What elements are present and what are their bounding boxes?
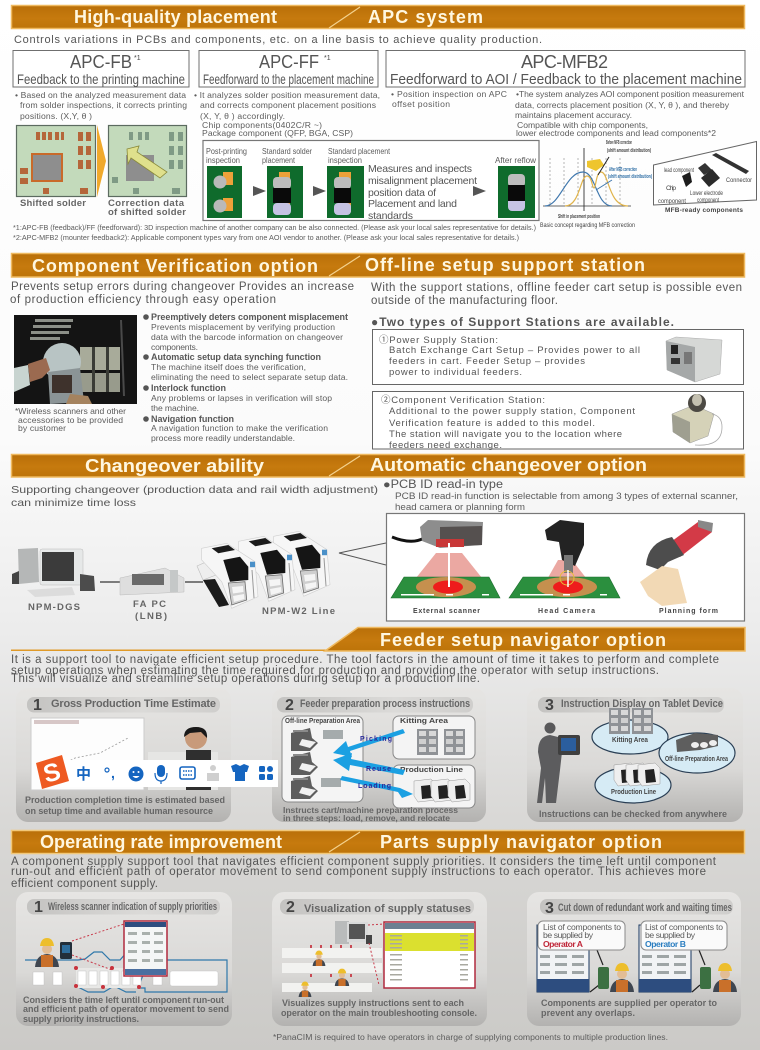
- arrow: orange chevron: [97, 125, 106, 197]
- panel: inspection flow: Standard solder: [262, 146, 312, 156]
- banner: Component Verification / Off-line setup: Off-line setup support station: [365, 255, 645, 275]
- labels: line equipment: NPM-W2 Line: [262, 606, 335, 617]
- box: APC-FB: [13, 50, 189, 87]
- list: verification features: The machine itself does the verification,: [151, 362, 306, 372]
- text: card 2 description: [281, 998, 477, 1018]
- list: verification features: [143, 312, 348, 443]
- chart: MFB correction concept: Basic concept regarding MFB correction: [540, 222, 635, 229]
- text: inspection description: position data of: [368, 187, 436, 199]
- intro: parts supply: [11, 856, 717, 890]
- box: APC-FB: APC-FB: [70, 52, 132, 72]
- box: APC-FF: *1: [324, 55, 331, 62]
- banner: Changeover ability / Automatic changeover: Automatic changeover option: [370, 455, 647, 475]
- text: APC-MFB2 description: lower electrode components and lead components*2: [516, 128, 716, 138]
- text: APC-FF description: • It analyzes solder position measurement data,: [194, 90, 380, 100]
- labels: line equipment: [28, 599, 335, 622]
- card 1: gross production time estimate: [16, 688, 231, 822]
- toolbar glyphs: [76, 764, 273, 784]
- section: changeover ability / automatic changeover: [11, 454, 744, 622]
- icon: after reflow board: [498, 166, 535, 218]
- text: card 3 description: Components are supplied per operator to: [541, 998, 718, 1008]
- box: power supply station: ①Power Supply Station:: [379, 335, 498, 346]
- chart: MFB correction concept: (shift amount distribution): [607, 148, 651, 154]
- text: card 1 description: Production completion time is estimated based: [25, 795, 225, 805]
- text: APC-MFB2 description: [391, 89, 745, 138]
- intro: component verification: [10, 281, 354, 306]
- oval: kitting area: Kitting Area: [612, 737, 648, 744]
- text: APC-MFB2 description: data, corrects placement position (X, Y, θ ), and thereby: [515, 100, 730, 110]
- list: verification features: Navigation function: [151, 414, 234, 424]
- text: APC-FF description: Chip components(0402C/R ~): [202, 120, 322, 130]
- card 2: feeder preparation process: [272, 688, 486, 823]
- icon: FA PC: [120, 568, 184, 595]
- oval: production line: Production Line: [611, 789, 656, 796]
- text: card 1 description: [25, 795, 225, 816]
- footnotes: [13, 223, 536, 242]
- intro: changeover: Supporting changeover (production data and rail width adjustment): [11, 484, 378, 496]
- box: component verification station: feeders need exchange.: [389, 440, 502, 451]
- text: APC-MFB2 description: •The system analyzes AOI component position measurement: [516, 89, 745, 99]
- panel: kitting area: Kitting Area: [400, 718, 448, 725]
- group: operator B instruction: Operator B: [645, 939, 686, 949]
- photo: wireless scanner in use: [14, 315, 137, 404]
- text: APC-FF description: (X, Y, θ ) accordingly.: [200, 111, 285, 121]
- text: inspection description: [368, 163, 477, 222]
- card 3: tablet instruction display: 3: [545, 697, 554, 714]
- text: card 2 description: Instructs cart/machine preparation process: [283, 805, 458, 815]
- labels: line equipment: NPM-DGS: [28, 602, 80, 613]
- intro: changeover: can minimize time loss: [11, 497, 136, 509]
- intro: feeder setup: setup operations when estimating the time required for production and providing the operator with setup instructions.: [11, 665, 659, 677]
- box: component verification station: Verification feature is added to this model.: [389, 418, 595, 429]
- panel: inspection flow: Post-printing: [206, 146, 247, 156]
- card 1: wireless scanner indication: [16, 892, 232, 1026]
- section: high-quality placement / APC system: [12, 6, 756, 242]
- banner: Operating rate / Parts supply navigator: Operating rate improvement: [40, 832, 282, 852]
- card 3: tablet instruction display: [527, 688, 743, 822]
- caption: wireless scanner: accessories to be provided: [18, 415, 123, 425]
- group: operator A instruction: Operator A: [543, 939, 583, 949]
- group: operator B instruction: List of components to: [645, 922, 723, 932]
- group: operator A instruction: [537, 921, 634, 992]
- arrows: picking, reuse, loading: [333, 729, 413, 798]
- labels: solder images: Shifted solder: [20, 198, 86, 209]
- labels: arrows: Loading: [358, 783, 391, 790]
- image: shifted solder board: [16, 126, 96, 196]
- intro: component verification: of production efficiency through easy operation: [10, 294, 276, 306]
- text: APC-MFB2 description: Compatible with chip components,: [517, 120, 648, 130]
- chart: MFB correction concept: Shift in placement position: [558, 214, 600, 220]
- text: APC-FB description: • Based on the analyzed measurement data: [15, 90, 186, 100]
- box: APC-MFB2: [386, 50, 745, 88]
- intro: off-line support: outside of the manufacturing floor.: [371, 295, 558, 307]
- card 2: visualization of supply statuses: Visualization of supply statuses: [304, 903, 471, 915]
- diagram: operator path: [25, 924, 227, 992]
- list: verification features: Automatic setup data synching function: [151, 352, 321, 362]
- text: card 1 description: and efficient path of operator movement to send: [23, 1004, 229, 1014]
- section: component verification / off-line setup: [10, 254, 744, 451]
- arrow: flow 1: [253, 186, 266, 196]
- panel: inspection flow: inspection: [206, 155, 240, 165]
- intro: off-line support: [371, 282, 742, 307]
- intro: feeder setup: It is a support tool to navigate efficient setup procedure. The tool factors in the amount of time it takes to perform and complete: [11, 654, 719, 666]
- icon: verification station unit: [672, 394, 722, 445]
- banner: Component Verification / Off-line setup: [12, 254, 744, 277]
- text: APC-MFB2 description: • Position inspection on APC: [391, 89, 507, 99]
- text: card 1 description: on setup time and available human resource: [25, 806, 213, 816]
- text: inspection description: misalignment placement: [368, 175, 477, 187]
- group: operator B instruction: be supplied by: [645, 930, 696, 940]
- banner: High-quality placement / APC system: APC system: [368, 7, 483, 27]
- text: card 1 description: supply priority instructions.: [23, 1014, 139, 1024]
- panel: MFB-ready components: Lower electrode: [690, 190, 723, 197]
- caption: wireless scanner: [15, 406, 126, 433]
- intro: changeover: [11, 484, 378, 509]
- text: APC-FB description: from solder inspections, it corrects printing: [20, 100, 187, 110]
- list: verification features: the machine.: [151, 403, 199, 413]
- intro: feeder setup: This will visualize and streamline setup operations during setup for a production line.: [11, 673, 480, 685]
- list: verification features: Any problems or lapses in verification will stop: [151, 393, 332, 403]
- card 2: visualization of supply statuses: 2: [286, 899, 295, 916]
- illustration: external scanner: [391, 520, 500, 598]
- box: APC-MFB2: APC-MFB2: [521, 52, 608, 72]
- panel: MFB-ready components: Connector: [726, 177, 753, 184]
- chart: MFB correction concept: [540, 140, 652, 229]
- panel: inspection flow: After reflow: [495, 155, 537, 165]
- list: verification features: eliminating the need to select separate setup data.: [151, 372, 348, 382]
- icon: standard placement board: [327, 166, 364, 218]
- box: power supply station: power to individual feeders.: [389, 367, 522, 378]
- card 1: gross production time estimate: 1: [33, 697, 42, 714]
- banner: High-quality placement / APC system: [12, 6, 744, 28]
- box: component verification station: The station will navigate you to the location where: [389, 429, 622, 440]
- card 2: visualization of supply statuses: [272, 892, 487, 1026]
- box: power supply station: [372, 330, 744, 384]
- screen: supply priority list: [124, 921, 167, 976]
- icon: NPM-DGS computer: [12, 548, 95, 597]
- panel: MFB-ready components: lead component: [664, 168, 694, 174]
- panel: MFB-ready components: Chip: [666, 185, 676, 192]
- text: card 2 description: [283, 805, 458, 823]
- icon: console computer: [335, 921, 372, 944]
- connector: PC to FA PC: [100, 581, 120, 583]
- callout lines to panel: [339, 543, 386, 565]
- labels: arrows: [358, 736, 392, 790]
- intro: parts supply: efficient component supply.: [11, 878, 158, 890]
- heading: two types of support stations: ●Two types of Support Stations are available.: [371, 315, 674, 329]
- panel: inspection flow: inspection: [328, 155, 362, 165]
- text: PCB ID read-in type: ●PCB ID read-in type: [383, 479, 503, 491]
- illustration: head camera: [509, 520, 620, 598]
- text: card 2 description: in three steps: load, remove, and relocate: [283, 813, 450, 823]
- box: APC-FF: Feedforward to the placement machine: [203, 71, 374, 87]
- arrow: flow 3: [473, 186, 486, 196]
- text: inspection description: standards: [368, 210, 413, 222]
- text: card 2 description: Visualizes supply instructions sent to each: [282, 998, 464, 1008]
- connector: FA PC to line: [185, 581, 203, 583]
- card 3: cut down of redundant work: [527, 892, 741, 1026]
- box: power supply station: feeders in cart. Feeder Setup – provides: [389, 356, 585, 367]
- labels: line equipment: FA PC: [133, 599, 166, 610]
- arrow: flow 2: [313, 186, 326, 196]
- panel: kitting area: [393, 716, 475, 759]
- banner: Feeder setup navigator option: [11, 628, 745, 651]
- panel: inspection flow: placement: [262, 155, 296, 165]
- illustration: planning form scanner: [640, 520, 713, 606]
- icon: worker with scanner: [35, 938, 72, 967]
- box: APC-FB: Feedback to the printing machine: [17, 71, 185, 87]
- intro text: Controls variations in PCBs and components, etc. on a line basis to achieve quality production.: [14, 34, 542, 46]
- icon: operator with tablet: [537, 722, 580, 803]
- icon: orange S logo: S: [40, 757, 64, 789]
- banner: High-quality placement / APC system: High-quality placement: [74, 7, 277, 27]
- icon: post-printing board: [207, 166, 242, 218]
- text: card 2 description: operator on the main troubleshooting console.: [281, 1008, 477, 1018]
- text: APC-FB description: positions. (X,Y, θ ): [20, 111, 92, 121]
- text: APC-FF description: and corrects component placement positions: [200, 100, 376, 110]
- card 3: tablet instruction display: Instruction Display on Tablet Device: [561, 698, 723, 710]
- text: APC-FF description: [194, 90, 380, 138]
- icon: orange S logo: [36, 755, 69, 789]
- text: APC-FB description: [15, 90, 187, 121]
- caption: wireless scanner: *Wireless scanners and other: [15, 406, 126, 416]
- chart: MFB correction concept: Before MFB correction: [606, 140, 632, 146]
- list: verification features: Interlock function: [151, 383, 226, 393]
- text: card 3 description: Instructions can be checked from anywhere: [539, 809, 727, 819]
- intro: off-line support: With the support stations, offline feeder cart setup is possible even: [371, 282, 742, 294]
- banner: Component Verification / Off-line setup: Component Verification option: [32, 256, 318, 276]
- toolbar glyphs: 中: [76, 766, 91, 783]
- box: component verification station: ②Component Verification Station:: [381, 395, 545, 406]
- labels: line equipment: (LNB): [135, 611, 167, 622]
- labels: solder images: of shifted solder: [108, 207, 186, 218]
- label: planning form: Planning form: [659, 608, 718, 615]
- label: MFB-ready components: MFB-ready components: [665, 207, 743, 214]
- image: correction data board: [108, 126, 186, 196]
- text: APC-MFB2 description: offset position: [392, 99, 450, 109]
- chart: MFB correction concept: After MFB correction: [609, 167, 637, 173]
- list: verification features: Preemptively deters component misplacement: [151, 312, 348, 322]
- text: card 3 description: prevent any overlaps.: [541, 1008, 635, 1018]
- box: component verification station: [372, 392, 744, 451]
- banner: Changeover ability / Automatic changeover: [12, 454, 744, 477]
- list: verification features: A navigation function to make the verification: [151, 423, 328, 433]
- labels: solder images: [20, 198, 186, 218]
- box: component verification station: Additional to the power supply station, Component: [389, 406, 635, 417]
- caption: wireless scanner: by customer: [18, 423, 66, 433]
- section: operating rate / parts supply navigator: [11, 830, 744, 1042]
- card 3: cut down of redundant work: 3: [545, 900, 554, 917]
- panel: inspection flow: [203, 140, 539, 222]
- oval: off-line preparation area: Off-line Preparation Area: [665, 756, 728, 763]
- oval: production line: [595, 763, 671, 803]
- card 1: wireless scanner indication: 1: [34, 899, 43, 916]
- card 1: gross production time estimate: Gross Production Time Estimate: [51, 698, 216, 710]
- footnote: PanaCIM: *PanaCIM is required to have operators in charge of supplying components to multiple production lines.: [273, 1032, 668, 1042]
- panel: off-line preparation area: Off-line Preparation Area: [285, 718, 360, 725]
- labels: solder images: Correction data: [108, 198, 185, 209]
- list: verification features: data with the barcode information on changeover: [151, 332, 343, 342]
- panel: MFB-ready components: [654, 142, 756, 205]
- intro: feeder setup: [11, 654, 719, 685]
- oval: kitting area: [592, 708, 668, 754]
- card 1: wireless scanner indication: Wireless scanner indication of supply priorities: [48, 901, 217, 913]
- footnotes: *2:APC-MFB2 (mounter feedback2): Applicable component types vary from one AOI vendor to another. (Please ask your local sales representative for details.): [13, 233, 519, 242]
- box: APC-FB: *1: [134, 55, 141, 62]
- text: card 1 description: Considers the time left until component run-out: [23, 995, 224, 1005]
- labels: arrows: Picking: [360, 736, 392, 743]
- toolbar glyphs: ,: [111, 765, 115, 781]
- text: APC-MFB2 description: maintains placement accuracy.: [515, 110, 632, 120]
- box: APC-FF: [199, 50, 378, 87]
- text: inspection description: Measures and inspects: [368, 163, 472, 175]
- card 2: feeder preparation process: Feeder preparation process instructions: [300, 698, 470, 710]
- list: verification features: components.: [151, 342, 198, 352]
- group: operator B instruction: [639, 921, 737, 992]
- icon: standard solder board: [267, 166, 303, 218]
- card 2: feeder preparation process: 2: [285, 697, 294, 714]
- footnotes: *1:APC-FB (feedback)/FF (feedforward): 3D inspection machine of another company can be also connected. (Please ask your local sales representative for details.): [13, 223, 536, 232]
- panel: production line: [393, 765, 475, 808]
- box: power supply station: Batch Exchange Cart Setup – Provides power to all: [389, 345, 640, 356]
- table: supply status: [384, 922, 475, 988]
- banner: Operating rate / Parts supply navigator: Parts supply navigator option: [380, 832, 662, 852]
- intro: parts supply: run-out and efficient path of operator movement to send component supply instructions to each operator. This achieves more: [11, 866, 706, 878]
- diagram: supply lines with operators: [282, 924, 384, 997]
- icon: power supply unit: [666, 337, 722, 382]
- panel: inspection flow: Standard placement: [328, 146, 390, 156]
- panel: MFB-ready components: component: [658, 198, 686, 205]
- intro: parts supply: A component supply support tool that navigates efficient component supply priorities. It considers the time left until component: [11, 856, 717, 868]
- icon: NPM-W2 line machines: [197, 531, 330, 608]
- group: operator A instruction: be supplied by: [543, 930, 594, 940]
- box: APC-FF: APC-FF: [259, 52, 319, 72]
- banner: Operating rate / Parts supply navigator: [12, 830, 744, 854]
- panel: PCB ID read-in types: [386, 514, 744, 621]
- list: verification features: process more readily understandable.: [151, 433, 295, 443]
- label: head camera: Head Camera: [538, 608, 595, 615]
- panel: production line: Production Line: [400, 767, 463, 774]
- label: external scanner: External scanner: [413, 608, 480, 615]
- panel: MFB-ready components: component: [697, 197, 719, 204]
- banner: Changeover ability / Automatic changeover: Changeover ability: [85, 456, 264, 476]
- labels: arrows: Reuse: [366, 766, 391, 773]
- oval: off-line preparation area: [659, 733, 735, 773]
- text: APC-FF description: Package component (QFP, BGA, CSP): [202, 128, 353, 138]
- text: inspection description: Placement and land: [368, 198, 457, 210]
- text: PCB ID read-in type: head camera or planning form: [395, 502, 525, 513]
- text: card 1 description: [23, 995, 229, 1024]
- banner: Feeder setup navigator option: Feeder setup navigator option: [380, 630, 666, 650]
- group: operator A instruction: List of components to: [543, 922, 621, 932]
- intro: component verification: Prevents setup errors during changeover Provides an increase: [11, 281, 354, 293]
- text: PCB ID read-in type: [383, 479, 738, 513]
- chart: MFB correction concept: (shift amount distribution): [608, 174, 652, 180]
- text: card 3 description: [541, 998, 718, 1018]
- chart: production time: [31, 718, 144, 790]
- list: verification features: Prevents misplacement by verifying production: [151, 322, 335, 332]
- panel: off-line preparation area: [282, 716, 363, 802]
- IME toolbar overlay: [36, 755, 278, 789]
- text: PCB ID read-in type: PCB ID read-in function is selectable from among 3 types of external scanner,: [395, 491, 738, 502]
- photo: operator: [148, 727, 218, 790]
- section: feeder setup navigator: [11, 628, 745, 823]
